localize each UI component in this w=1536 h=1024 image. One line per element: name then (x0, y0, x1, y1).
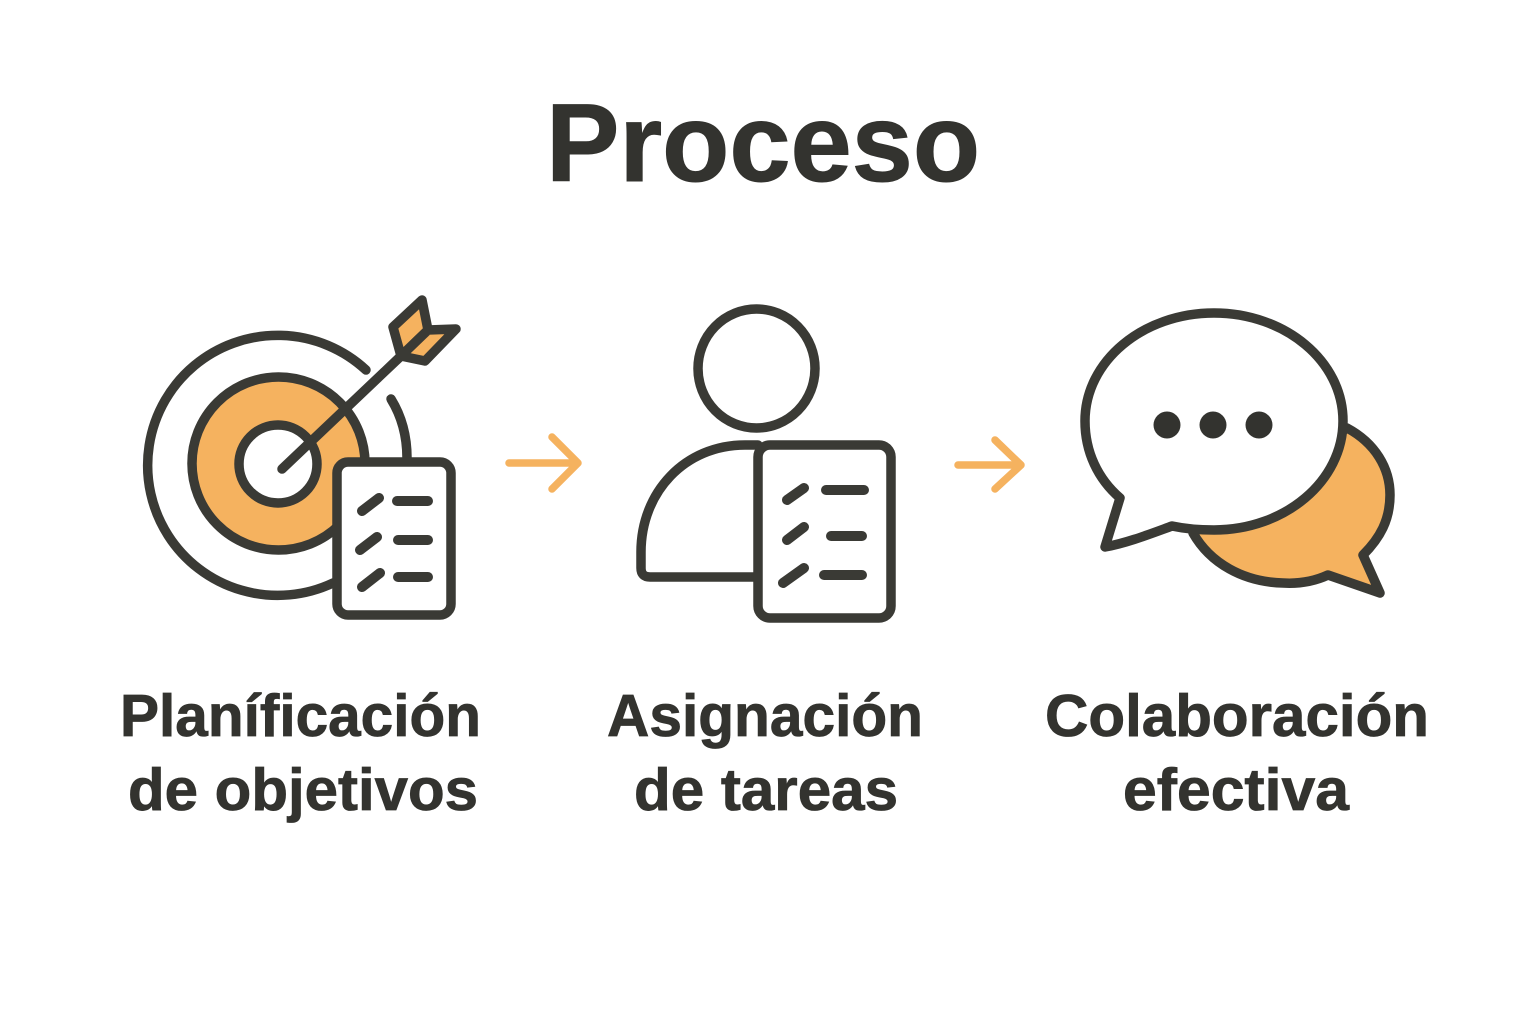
label: step three: efectiva (1123, 757, 1350, 823)
task list document (758, 445, 891, 618)
arrow shaft (282, 356, 401, 469)
label: step one (120, 683, 481, 823)
arrow: step one to step two (509, 437, 578, 489)
label: step one: Planíficación (120, 683, 481, 749)
label: step one: de objetivos (128, 757, 478, 823)
white speech bubble (1085, 313, 1343, 547)
arrow: step two to step three (958, 440, 1021, 489)
outer target ring (148, 335, 407, 595)
arrow fletching (393, 300, 456, 361)
orange speech bubble (1193, 428, 1390, 593)
ellipsis dots (1154, 412, 1272, 438)
icon: person with task list (641, 309, 891, 618)
label: step two (607, 683, 923, 823)
target centre (239, 425, 317, 503)
person head (698, 309, 815, 428)
orange target ring (192, 377, 365, 550)
label: step two: Asignación (607, 683, 923, 749)
label: step three (1045, 683, 1429, 823)
icon: target with arrow and checklist (148, 300, 456, 615)
label: step three: Colaboración (1045, 683, 1429, 749)
icon: chat bubbles (1085, 313, 1390, 593)
person body (641, 445, 758, 577)
label: step two: de tareas (634, 757, 898, 823)
checklist document (337, 462, 451, 615)
title: Proceso (546, 82, 980, 205)
